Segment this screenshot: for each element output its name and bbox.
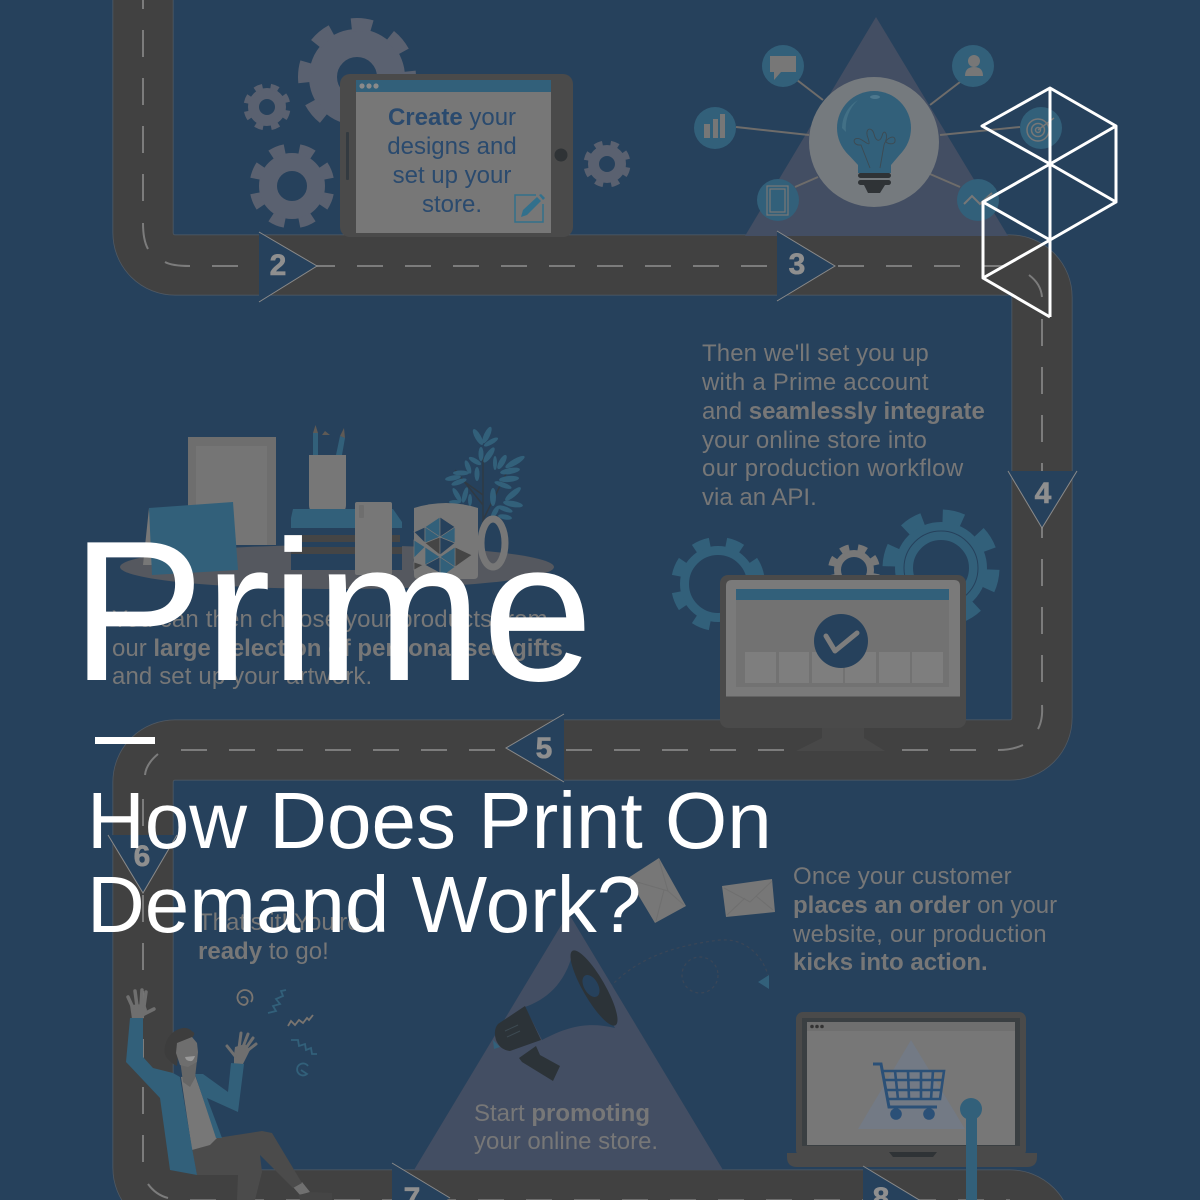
- icon: edit pencil: [515, 194, 545, 222]
- marker: step 6: [108, 835, 177, 893]
- marker: step 8: [863, 1166, 921, 1200]
- illustration: dotted flight path: [610, 940, 769, 993]
- text: step 5 description: our large selection of personalised gifts: [112, 635, 563, 662]
- icon: person: [952, 45, 994, 87]
- books: [287, 509, 402, 570]
- illustration: monitor with checkmark: [720, 575, 966, 751]
- marker: step 4: 4: [1035, 477, 1052, 510]
- text: step 3 description: with a Prime account: [701, 369, 929, 396]
- text: create your designs: designs and: [387, 133, 517, 160]
- text: step 6 description: That's it! You're: [198, 909, 361, 936]
- text: step 3 description: our production workflow: [702, 455, 964, 482]
- text: step 6 description: ready to go!: [198, 938, 329, 965]
- illustration: celebrating person: [126, 990, 332, 1200]
- icon: target: [1020, 107, 1062, 149]
- marker: step 5: [506, 714, 564, 782]
- text: step 3 description: and seamlessly integrate: [702, 398, 985, 425]
- text: step 3 description: via an API.: [702, 484, 817, 511]
- marker: step 5: 5: [536, 732, 552, 765]
- icon: lightbulb: [837, 91, 911, 193]
- title divider dash: [95, 737, 155, 744]
- right hand: [227, 1033, 256, 1064]
- subtitle: How Does Print On: [87, 776, 772, 865]
- text: create your designs: set up your: [393, 162, 511, 189]
- illustration: lightbulb network: [694, 17, 1062, 236]
- jacket: [126, 1018, 244, 1175]
- plant: [445, 426, 526, 538]
- icon: growth line: [957, 179, 999, 221]
- illustration: celebration squiggles: [237, 990, 317, 1075]
- illustration: laptop with shopping cart: [787, 1012, 1037, 1200]
- icon: shopping cart: [873, 1064, 944, 1120]
- marker: step 2: 2: [270, 249, 286, 282]
- marker: step 2: [259, 232, 317, 302]
- marker: step 6: 6: [134, 840, 150, 873]
- road: [143, 0, 1042, 1200]
- pens and cup: [309, 425, 346, 513]
- marker: step 3: 3: [789, 248, 805, 281]
- illustration: gears behind monitor: [669, 514, 995, 633]
- text: create your designs: Create your: [388, 104, 516, 131]
- logo: white hexagon outline: [982, 88, 1116, 317]
- text: step 8 description: Once your customer: [793, 863, 1012, 890]
- title: Prime: Prime: [71, 500, 593, 723]
- mug: [414, 503, 505, 579]
- text: step 8 description: kicks into action.: [793, 949, 988, 976]
- text: step 5 description: You can then choose your products from: [112, 606, 548, 633]
- left hand: [128, 990, 154, 1019]
- icon: chat: [762, 45, 804, 87]
- illustration: products on a table: [120, 425, 554, 589]
- marker: step 3: [777, 231, 835, 301]
- illustration: promoting triangle with megaphone: [414, 913, 723, 1170]
- illustration: tablet with step 2 text: [340, 74, 573, 237]
- trousers and shoe: [192, 1131, 332, 1200]
- illustration: gears behind tablet: [243, 19, 631, 230]
- icon: check badge: [814, 614, 868, 668]
- text: step 3 description: your online store into: [702, 427, 927, 454]
- text: step 8 description: places an order on your: [793, 892, 1057, 919]
- text: start promoting: your online store.: [474, 1128, 658, 1155]
- icon: bar chart: [694, 107, 736, 149]
- text: step 3 description: Then we'll set you up: [702, 340, 929, 367]
- text: start promoting: Start promoting: [474, 1100, 650, 1127]
- text: step 5 description: and set up your artwork.: [112, 663, 372, 690]
- head: [164, 1028, 198, 1087]
- text: step 8 description: website, our production: [792, 921, 1047, 948]
- subtitle: Demand Work?: [87, 860, 641, 949]
- icon: teal pin: [960, 1098, 982, 1200]
- icon: megaphone: [493, 945, 625, 1081]
- icon: tablet frame: [757, 179, 799, 221]
- marker: step 7: [392, 1163, 450, 1200]
- marker: step 4: [1008, 471, 1077, 528]
- illustration: envelopes: [628, 858, 775, 923]
- text: create your designs: store.: [422, 191, 482, 218]
